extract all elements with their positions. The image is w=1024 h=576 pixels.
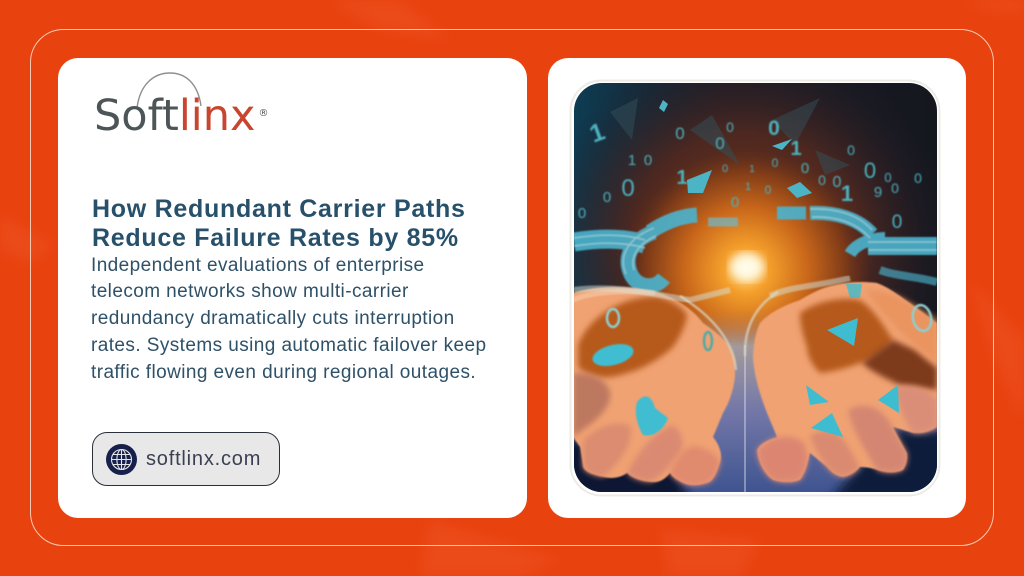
binary digits: 0 — [621, 175, 635, 202]
right hand — [753, 282, 937, 482]
icon: globe — [106, 444, 137, 475]
binary digits: 1 — [586, 117, 609, 148]
panel: text card — [58, 58, 527, 518]
binary digits: 0 — [847, 142, 855, 158]
binary digits: 0 — [818, 172, 826, 188]
binary digits: 9 — [874, 184, 882, 201]
dark triangles — [610, 98, 850, 175]
binary digits: 0 — [722, 163, 728, 175]
panel: image card — [548, 58, 966, 518]
binary digits: 1 — [790, 138, 802, 160]
broken chain links — [574, 209, 937, 286]
binary digits: 0 — [644, 152, 652, 169]
binary digits: 0 — [675, 124, 685, 143]
left cupped shadow — [578, 297, 687, 377]
photo: hands holding broken digital chain — [570, 80, 940, 496]
binary digits: 0 — [578, 205, 586, 222]
light flare — [730, 253, 764, 281]
body text: rates. Systems using automatic failover keep — [91, 335, 486, 356]
binary digits: 0 — [603, 189, 611, 206]
scattered shards — [659, 100, 812, 198]
binary digits: 1 — [749, 164, 755, 175]
binary digits: 0 — [801, 160, 809, 177]
body text: Independent evaluations of enterprise — [91, 254, 424, 276]
left hand — [573, 287, 735, 485]
binary digits: 0 — [768, 117, 780, 140]
body text — [91, 254, 486, 383]
heading: Reduce Failure Rates by 85% — [92, 224, 459, 252]
binary digits: 1 — [676, 167, 688, 189]
shirt — [574, 310, 937, 492]
binary digits: 0 — [726, 119, 734, 135]
logo wordmark: Softlinx ® — [94, 91, 268, 141]
binary digits — [578, 117, 922, 233]
binary digits: 0 — [731, 194, 739, 211]
binary digits: 0 — [914, 170, 922, 186]
right fingers — [757, 436, 808, 482]
binary digits: 0 — [715, 134, 725, 153]
body text: redundancy dramatically cuts interruption — [91, 308, 455, 329]
binary digits: 0 — [892, 212, 902, 233]
heading — [92, 195, 466, 252]
right cupped shadow — [800, 299, 893, 373]
binary digits: 1 — [745, 181, 751, 193]
cyan shapes on hands — [590, 284, 899, 437]
binary digits: 1 — [841, 181, 853, 206]
binary digits: 0 — [765, 183, 772, 197]
binary digits: 0 — [772, 156, 779, 170]
website button — [92, 432, 280, 486]
binary digits: 0 — [833, 174, 842, 191]
heading: How Redundant Carrier Paths — [92, 195, 466, 223]
logo arc — [136, 72, 202, 106]
binary digits: 1 — [628, 152, 636, 169]
left fingers — [573, 373, 610, 437]
binary digits: 0 — [891, 180, 899, 196]
hand outlines — [680, 292, 778, 370]
body text: traffic flowing even during regional outages. — [91, 362, 476, 383]
website label: softlinx.com — [146, 448, 261, 470]
body text: telecom networks show multi-carrier — [91, 281, 409, 302]
logo: Softlinx — [94, 72, 268, 141]
binary digits: 0 — [864, 158, 876, 183]
binary digits: 0 — [884, 170, 892, 185]
